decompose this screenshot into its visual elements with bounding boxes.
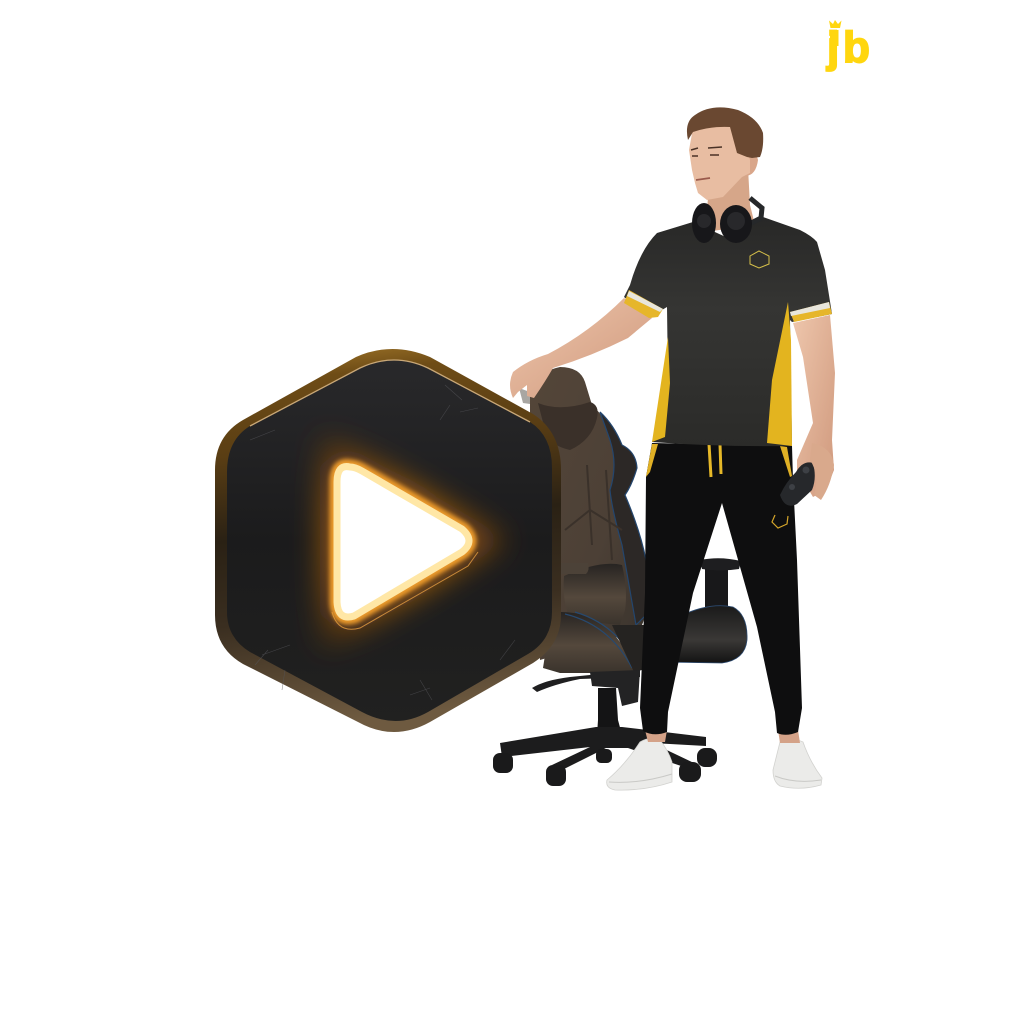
logo: jb with crown [826, 20, 870, 72]
shirt left sleeve cuff [624, 290, 663, 318]
play button gold ring [337, 467, 469, 617]
man mouth [696, 178, 710, 180]
man trousers [640, 443, 802, 735]
man t-shirt [624, 217, 832, 446]
logo crown [829, 20, 842, 28]
logo letters: b [843, 23, 870, 72]
man left arm and hand [510, 298, 652, 398]
hexagon play badge [215, 349, 561, 732]
chair tilt lever [532, 670, 640, 692]
man left shoe [607, 738, 672, 790]
badge top highlight [250, 360, 530, 426]
left shoe sole line [609, 774, 672, 782]
badge dark face with light edge [227, 360, 552, 721]
chair middle seat [612, 625, 650, 672]
chair five-star base [500, 727, 706, 770]
right shoe sole line [775, 776, 821, 781]
chair backrest stitching [565, 465, 622, 560]
man eyes and brows [691, 147, 722, 156]
trouser hexagon pocket mark [772, 515, 788, 528]
chair seat piping [565, 612, 636, 668]
chair arm pad near [555, 563, 589, 574]
chair grab bar [519, 388, 530, 404]
chair gas cylinder [597, 688, 622, 735]
shirt right sleeve cuff [790, 302, 832, 322]
man right arm [793, 315, 835, 497]
man fingers over controller [810, 443, 834, 500]
chair far seat cushion [640, 606, 747, 663]
play button inner ring [337, 467, 469, 617]
trouser drawstrings [709, 444, 721, 477]
man hair [687, 107, 763, 158]
man neck [705, 168, 755, 232]
chair mechanism [590, 670, 640, 706]
chair casters [493, 748, 717, 786]
trouser side stripes [646, 444, 792, 477]
chair backrest [530, 367, 648, 660]
chair far armrest [700, 558, 741, 613]
man ankles [645, 730, 800, 743]
man ear [745, 153, 758, 176]
shirt left yellow panel [652, 337, 670, 442]
chair side bolster with blue piping [600, 412, 648, 625]
gaming chair [493, 367, 747, 786]
headphones [692, 198, 762, 243]
play button halo [320, 430, 510, 655]
logo letters: j [826, 23, 839, 72]
man right shoe [773, 739, 822, 788]
shirt hexagon emblem [750, 251, 769, 268]
game controller [780, 462, 815, 506]
logo stem filler [830, 30, 838, 46]
chair lumbar cushion [564, 564, 626, 625]
man face [689, 122, 750, 200]
man standing [510, 107, 835, 790]
badge outer metal rim [215, 349, 561, 732]
play button outer trim line [332, 552, 478, 629]
chair neck pillow [538, 402, 598, 450]
shirt right yellow panel [767, 302, 792, 446]
badge surface scratches [250, 385, 515, 700]
chair front seat cushion [543, 612, 634, 673]
